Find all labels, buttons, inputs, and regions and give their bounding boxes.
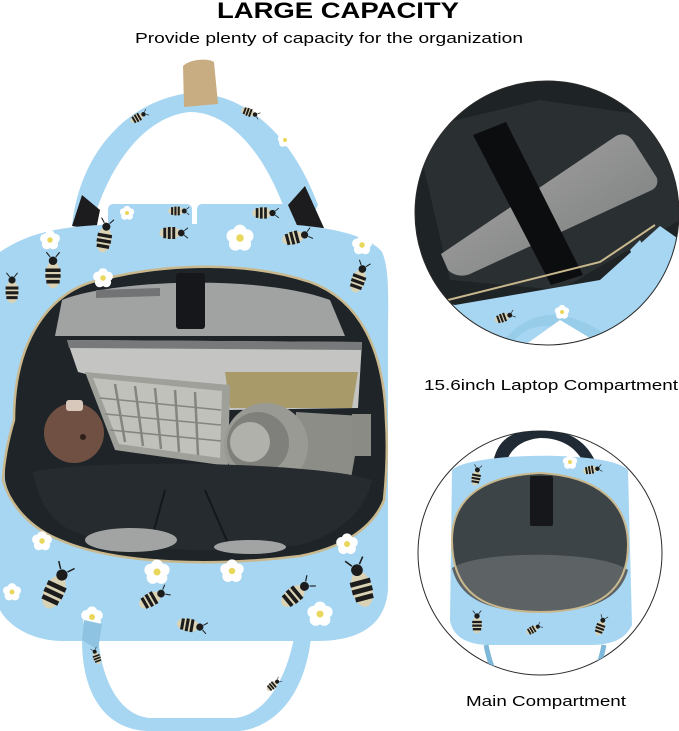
subtitle: Provide plenty of capacity for the organization <box>135 31 523 47</box>
bag body <box>0 224 388 641</box>
handle <box>494 431 594 459</box>
laptop compartment label: 15.6inch Laptop Compartment <box>424 377 679 394</box>
bag interior <box>5 267 387 562</box>
bees and flowers on bag <box>3 217 377 635</box>
circle inset: main compartment <box>418 430 662 680</box>
main compartment label: Main Compartment <box>466 693 627 710</box>
bottom handle <box>82 620 312 731</box>
bag exterior bottom <box>452 226 676 344</box>
lower pouch <box>33 464 372 550</box>
front pockets behind <box>108 204 192 232</box>
black loop strap <box>176 273 205 329</box>
laptop in bag <box>55 283 345 336</box>
tan loop tab <box>183 60 218 107</box>
strap <box>473 122 583 285</box>
circle inset: laptop compartment <box>415 81 679 350</box>
main backpack photo <box>0 60 388 731</box>
mini bag <box>450 456 632 645</box>
gold zipper <box>3 267 387 562</box>
top handle <box>72 93 324 232</box>
grey thermos <box>224 403 371 487</box>
notebook <box>67 340 362 410</box>
grey items <box>85 528 177 552</box>
laptop <box>441 134 657 276</box>
keyboard <box>85 372 230 466</box>
brown bottle <box>44 400 104 463</box>
